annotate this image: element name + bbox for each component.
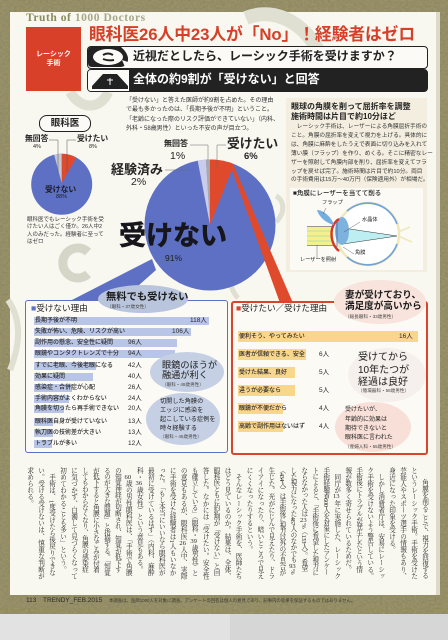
bar chart: reasons against: 手術内容がよくわからない — [35, 396, 107, 402]
label: ophthalmologists pill — [39, 115, 91, 132]
pie label: 受けない 91%: 91% — [165, 253, 182, 263]
bar chart: reasons against: 眼鏡やコンタクトレンズで十分 — [35, 351, 119, 357]
callout: edge infections: （眼科・45歳男性） — [160, 434, 202, 439]
article body: vertical text: はどう見ているのか。結果は、全体、 — [223, 467, 230, 579]
callout: age limits: 眼科医に言われた — [345, 435, 393, 441]
icon: eye cross-section — [307, 202, 412, 266]
icon: A badge — [88, 70, 129, 91]
bar chart: reasons against: 40人 — [128, 373, 142, 380]
bar chart: reasons against: 長期予後が不明 — [35, 318, 77, 324]
article body: vertical text: というレーシック手術。手術を受けた — [410, 467, 417, 579]
bar chart: reasons against: トラブルが多い — [35, 441, 77, 447]
article body: vertical text: い。受ける受けないは、慎重な判断が — [37, 467, 44, 579]
article body: vertical text: 手術経験者600人を対象にしたアンケー — [322, 467, 329, 575]
callout: age limits — [335, 402, 411, 452]
bar chart: reasons for: 4人 — [319, 405, 329, 412]
pie label: 受けない 91%: 受けない — [119, 221, 227, 251]
body text: ザーを照射して角膜内部を削り、屈折率を変えてフラ — [291, 160, 427, 166]
label: lens: 水晶体 — [362, 217, 378, 223]
footer: page number and issue: 本調査は、医師1000人を対象に調査。アンケートの回答は個人の意見であり、記事内の効果を保証するものではありません。 — [109, 598, 355, 603]
bar chart: reasons for: 医者が信頼できる、安全 — [239, 352, 305, 358]
callout: glasses are flexible: （眼科・49歳男性） — [162, 382, 204, 387]
caption: ophthalmologists: 眼科医でもレーシック手術を受 — [27, 217, 104, 223]
callout: edge infections: エッジに感染を — [160, 407, 203, 414]
bar chart: reasons against: 13人 — [128, 429, 142, 436]
pie label: 受けない 88%: 受けない — [45, 185, 76, 194]
bar chart: reasons against: 20人 — [128, 405, 142, 412]
chart: blue connector wedge — [72, 259, 156, 300]
callout: edge infections: 切開した角膜の — [160, 398, 203, 405]
body text: こと。角膜の屈折率を変えて視力を上げる。具体的に — [291, 133, 427, 139]
question bar — [87, 46, 428, 69]
bar chart: reasons for: 16人 — [399, 333, 413, 340]
chart: all doctors pie with red connector wedge — [144, 144, 292, 301]
body text: の手術費用は15万～40万円（保険適用外）が相場だ。 — [291, 177, 429, 183]
bar chart: reasons for: 便利そう、やってみたい — [239, 334, 305, 340]
body text: 薄い膜（フラップ）を作り、めくる。そこに精密なレー — [291, 151, 433, 157]
intro text: 外科・58歳男性）といった不安の声が目立つ。 — [126, 126, 252, 132]
heading — [291, 102, 411, 120]
callout: wife had it: 妻が受けており、 — [345, 290, 421, 301]
caption: ophthalmologists: はゼロ — [27, 239, 44, 245]
article body: vertical text: に手術を受けた経験者は1人もいなか — [168, 467, 175, 576]
bar chart: reasons against: 12人 — [128, 440, 142, 447]
diagram title: ■角膜にレーザーを当てて削る — [293, 190, 381, 197]
bar chart: reasons against: 角膜を切ったら再手術できない — [35, 406, 119, 412]
question bar: 近視だとしたら、レーシック手術を受けますか？ — [133, 49, 397, 63]
article body: vertical text: 角膜を削ることで、視力を回復する — [420, 479, 428, 579]
callout: edge infections — [146, 393, 220, 445]
pie label: 経験済み 2%: 経験済み — [111, 162, 163, 177]
panel: reasons for wanting surgery — [231, 301, 428, 455]
bar chart: reasons against: 副作用の懸念、安全性に疑問 — [35, 340, 113, 346]
bar chart: reasons against: 26人 — [128, 384, 142, 391]
caption: ophthalmologists: 人のみだった。経験者に至って — [27, 232, 104, 238]
article body: vertical text: の知覚神経が切断され、知覚が低下す — [113, 467, 120, 572]
callout: free but still no: 無料でも受けない — [106, 292, 188, 303]
pie label: 無回答 4%: 無回答 — [25, 134, 48, 143]
intro text — [126, 96, 279, 132]
pie label: 無回答 4%: 4% — [33, 144, 41, 150]
article body: vertical text: にくくなったりするという。 — [245, 467, 252, 553]
article body: vertical text: 身近になった印象を受ける。 — [388, 467, 395, 553]
bar chart: reasons for: 5人 — [319, 369, 329, 376]
label: flap: フラップ — [322, 200, 343, 206]
pie label: 無回答 1% — [164, 138, 188, 162]
bar chart: reasons for: 受けた結果、良好 — [239, 370, 287, 376]
bar chart: reasons for: 違うが必要なら — [239, 388, 281, 394]
pie label: 受けたい 8%: 8% — [89, 144, 97, 150]
callout: age limits: 年齢的に効果は — [345, 417, 387, 423]
bar chart: reasons for: 高齢で副作用はないはず — [239, 424, 305, 430]
pie label: 無回答 1%: 1% — [170, 150, 185, 162]
callout: glasses are flexible: 眼鏡のほうが — [162, 360, 217, 370]
bar chart: reasons against: 効果に疑問 — [35, 374, 65, 380]
bar chart: reasons for: 5人 — [319, 387, 329, 394]
callout: age limits: （産婦人科・55歳男性） — [345, 444, 396, 449]
pie label: 受けたい 6% — [227, 136, 278, 162]
caption: ophthalmologists — [27, 216, 104, 245]
bar chart: reasons for: 4人 — [319, 423, 329, 430]
panel: what is LASIK — [286, 98, 427, 272]
article body: vertical text: ならなかった人は 23 %（133人）。希望 — [300, 467, 307, 571]
article body: vertical text: しかし消費者庁は、安易にレーシッ — [377, 474, 384, 579]
article body: vertical text: した視力になった467人のなかでも 93 % — [289, 467, 296, 574]
bar chart: reasons against: 13人 — [128, 418, 142, 425]
footer: page number and issue: TRENDY_FEB.2015 — [43, 597, 102, 604]
chart: ophthalmologists pie — [31, 140, 92, 215]
pie label: 受けたい 6%: 6% — [244, 151, 258, 162]
callout: age limits: 期待できないと — [345, 426, 387, 432]
series title: Truth of 1000 Doctors — [26, 12, 146, 24]
footer: page number and issue: 113 — [26, 597, 36, 604]
article body: vertical text: の意見もあるが、眼科医 26 人中、実際 — [179, 467, 186, 579]
bar chart: reasons for — [238, 331, 418, 432]
category tag: red box: 手術 — [46, 60, 60, 67]
callout: glasses are flexible: 融通が利く — [162, 370, 208, 380]
intro text: 「受けない」と答えた医師が約9割を占めた。その理由 — [126, 98, 273, 104]
pie label: 受けたい 8% — [77, 134, 108, 150]
heading: reasons against: ■受けない理由 — [31, 303, 88, 313]
article body: vertical text: そんなレーシック手術を、医師たち — [234, 474, 241, 579]
bar chart: reasons against: 118人 — [190, 317, 207, 324]
article body: vertical text: （434人）は手術後に視力以外の不具合が — [278, 467, 285, 575]
bar chart: reasons against: 96人 — [128, 339, 142, 346]
pie label: 受けたい 8%: 受けたい — [77, 134, 108, 143]
callout: edge infections: 起こしている症例を — [160, 416, 216, 423]
diagram: laser on cornea — [290, 188, 423, 270]
bar chart: reasons against: 94人 — [128, 350, 142, 357]
answer bar — [87, 69, 428, 92]
bar chart: reasons against: 眼科医自身が受けていない — [35, 419, 107, 425]
bar chart: reasons against: すでに老眼、今後老眼になる — [35, 363, 113, 369]
callout: ten years good: （循環器科・58歳男性） — [358, 388, 409, 393]
callout: ten years good: 経過は良好 — [358, 377, 408, 388]
article body: vertical text: 手術は、1度受けたら後戻りできな — [48, 474, 55, 576]
article body: vertical text: イアイになったり、暗いところで見え — [256, 467, 263, 579]
article body: vertical text: 最初に受けているはず」（内科、麻酔 — [146, 467, 153, 576]
pie label: 経験済み 2%: 2% — [131, 176, 146, 188]
article body: vertical text: 芸能人やスポーツ選手の情報もあり、 — [399, 467, 406, 579]
heading: 施術時間は片目で約10分ほど — [291, 112, 396, 120]
callout: free but still no — [98, 285, 188, 313]
body text: は、角膜に麻酔をしたうえで表面に切り込みを入れて — [291, 142, 427, 148]
pie label: 受けたい 6%: 受けたい — [227, 136, 278, 151]
answer bar: 全体の約9割が「受けない」と回答 — [133, 72, 320, 86]
label: laser: レーザーを照射 — [300, 257, 336, 263]
heading: reasons for: ■受けたい／受けた理由 — [236, 303, 327, 313]
pie label: 経験済み 2% — [111, 162, 163, 188]
article body: vertical text: 60 歳の男性眼科医は、「手術で角膜 — [124, 474, 131, 576]
article body: vertical text: 初めてわかることも多い」という。 — [59, 467, 66, 573]
heading: 眼球の角膜を削って屈折率を調整 — [291, 102, 411, 111]
article body: vertical text: 求められる。 — [26, 467, 33, 507]
pie label: 無回答 1%: 無回答 — [164, 139, 188, 148]
article body: vertical text: 答した。なかには「受けたい。安全性 — [201, 467, 208, 579]
callout: wife had it: （総長眼科・33歳男性） — [345, 314, 396, 319]
icon: Q badge — [88, 47, 128, 67]
body text: レーシック手術は、レーザーによる角膜屈折手術の — [297, 124, 427, 130]
callout: ten years good — [348, 348, 426, 402]
callout: edge infections: 時々経験する — [160, 425, 197, 432]
callout: age limits: 受けたいが、 — [345, 407, 381, 413]
bar chart: reasons for: 6人 — [319, 351, 329, 358]
bar chart: reasons against: 執刀医の技術差が大きい — [35, 430, 101, 436]
bar chart: reasons for: 眼鏡が不便だから — [239, 406, 287, 412]
article body: vertical text: に気づかず、白濁して見づらくなって — [70, 467, 76, 579]
bar chart: reasons against: 42人 — [128, 362, 142, 369]
pie label: 無回答 4% — [25, 134, 48, 150]
article body: vertical text: 科・ 36 歳女性）という意見もある。 — [135, 467, 142, 573]
article body: vertical text: が低下すると角膜に小さなごみが付着 — [91, 467, 98, 572]
callout: wife had it — [334, 280, 426, 324]
callout: ten years good: 10年たつが — [358, 365, 409, 376]
article body: vertical text: 眼科医ともに約9割が「受けない」と回 — [212, 467, 219, 575]
article body: vertical text: トによると、「手術後に希望した視力に — [311, 467, 318, 575]
footer: page number and issue — [26, 597, 355, 604]
headline: 眼科医26人中23人が「No」！経験者はゼロ — [89, 25, 415, 44]
bar chart: reasons against: 106人 — [172, 328, 189, 335]
bar chart: reasons against: 24人 — [128, 395, 142, 402]
category tag: red box: レーシック — [36, 51, 71, 58]
intro text: 「老齢になった際のリスク評価ができていない」（内科、 — [126, 117, 279, 123]
article body: vertical text: 手術後にトラブルが発生したという情 — [355, 467, 362, 572]
caption: ophthalmologists: けたい人はごく僅か。26人中2 — [27, 224, 102, 230]
article body: vertical text: 報が数多く寄せられているためだ。 — [344, 467, 351, 573]
callout: free but still no: （眼科・37歳女性） — [107, 304, 149, 308]
label: ophthalmologists pill: 眼科医 — [51, 118, 79, 129]
label: cornea: 角膜 — [355, 250, 365, 256]
callout: wife had it: 満足度が高いから — [345, 301, 422, 312]
intro text: で最も多かったのは、「長期予後が不明」ということ。 — [126, 107, 273, 113]
article body: vertical text: 生じた。光がにじんで見えたり、ドラ — [267, 467, 274, 579]
callout: ten years good: 受けてから — [358, 352, 408, 363]
pie label: 受けない 88%: 88% — [56, 194, 67, 200]
article body: vertical text: してもわからなくなり、角膜の感染症 — [80, 467, 87, 572]
article body: vertical text: ク手術を受けないよう警告している。 — [366, 467, 373, 579]
article body: vertical text — [26, 466, 429, 580]
body text — [291, 123, 433, 183]
article body: vertical text: った。「もし本当にいいなら眼科医が — [157, 467, 164, 576]
callout: glasses are flexible — [150, 352, 224, 392]
panel: reasons for not wanting surgery — [25, 300, 228, 453]
bar chart: reasons against: 感染症・合併症が心配 — [35, 385, 95, 391]
bar chart: reasons against — [34, 316, 209, 448]
article body: vertical text: るのが大きな問題」と指摘する。「知覚 — [102, 467, 109, 575]
bar chart: reasons against: 失敗が怖い、危険、リスクが高い — [35, 329, 125, 335]
category tag: red box — [26, 27, 81, 91]
article body: vertical text: も確立している」（眼科・ 39 歳男性）と — [190, 467, 197, 576]
pie label: 受けない 88% — [45, 185, 76, 200]
body text: ップを戻せば完了。施術時間は片目で約10分。両目 — [291, 169, 422, 175]
article body: vertical text: 同庁が 13 年に実施した、レーシック — [333, 474, 340, 579]
